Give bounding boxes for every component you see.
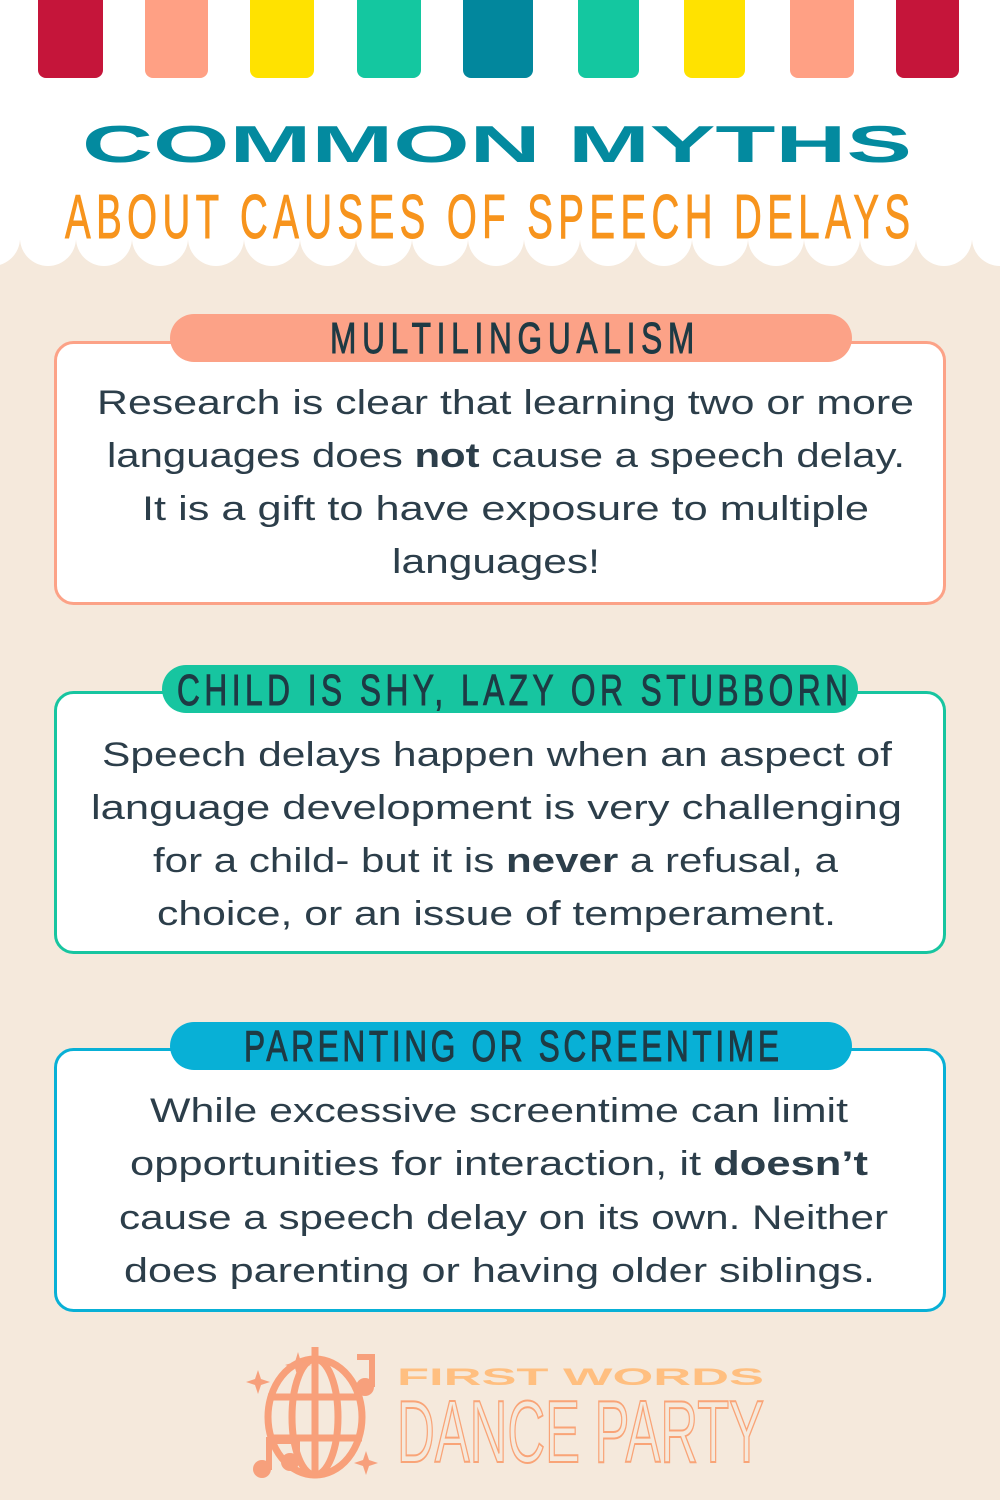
text block: language development is very challenging (91, 789, 902, 827)
text block: cause a speech delay on its own. Neither (119, 1199, 888, 1237)
title: COMMON MYTHS (82, 116, 912, 174)
text block (97, 384, 914, 581)
text block (91, 736, 902, 933)
text block: opportunities for interaction, it doesn’t (130, 1145, 868, 1183)
text block: languages! (392, 543, 600, 581)
header white area (0, 0, 1000, 266)
panel: shy (56, 692, 944, 952)
text block: Speech delays happen when an aspect of (102, 736, 893, 774)
heading: shy: CHILD IS SHY, LAZY OR STUBBORN (177, 666, 848, 715)
panel: multilingualism (56, 342, 944, 604)
icon: disco globe (246, 1347, 378, 1478)
subtitle: ABOUT CAUSES OF SPEECH DELAYS (65, 182, 910, 251)
stripes (38, 0, 959, 78)
text block: choice, or an issue of temperament. (157, 895, 836, 933)
text block: It is a gift to have exposure to multiple (142, 490, 869, 528)
text block: for a child- but it is never a refusal, a (153, 842, 838, 880)
logo text: FIRST WORDS (397, 1364, 764, 1391)
heading: multilingualism: MULTILINGUALISM (330, 314, 694, 363)
text block (119, 1092, 888, 1290)
heading: multilingualism (170, 314, 852, 363)
text block: languages does not cause a speech delay. (107, 437, 905, 475)
text block: While excessive screentime can limit (150, 1092, 849, 1130)
heading: parenting: PARENTING OR SCREENTIME (244, 1022, 779, 1071)
logo (246, 1347, 764, 1481)
text block: does parenting or having older siblings. (124, 1252, 875, 1290)
text block: Research is clear that learning two or more (97, 384, 914, 422)
logo: DANCE PARTY (397, 1382, 764, 1481)
panel: parenting (56, 1050, 944, 1310)
